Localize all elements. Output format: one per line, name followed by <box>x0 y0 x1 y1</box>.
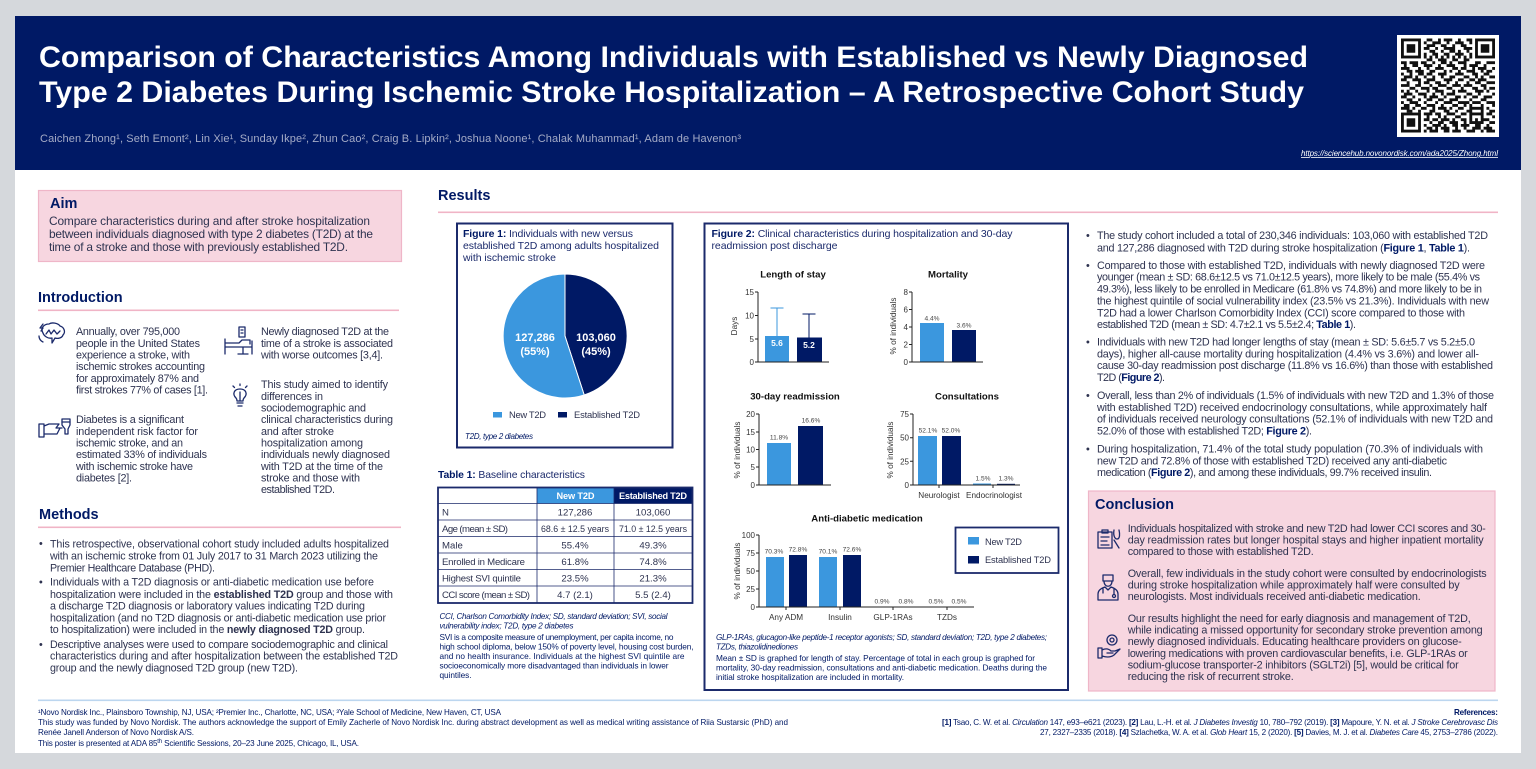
results bullets <box>1086 230 1494 479</box>
chart: length of stay: Days <box>730 317 739 335</box>
figure 1 footnote: T2D, type 2 diabetes <box>465 432 533 441</box>
chart: anti-diabetic medication: 70.1% <box>819 548 837 556</box>
icon: doctor <box>1098 575 1118 600</box>
results bullets: • <box>1086 443 1090 455</box>
intro text: worse outcomes: with worse outcomes [3,4]. <box>260 350 383 362</box>
references: [1] Tsao, C. W. et al. Circulation 147, e93–e621 (2023). [2] Lau, L.-H. et al. J Diabetes Investig 10, 780–792 (2019). [3] Mapoure, Y. N. et al. J Stroke Cerebrovasc Dis <box>942 718 1498 727</box>
chart: anti-diabetic medication: 75 <box>746 549 756 558</box>
chart: consultations: 75 <box>900 410 910 419</box>
chart: anti-diabetic medication: Insulin <box>828 613 852 622</box>
chart: length of stay: 5.6 <box>771 338 783 348</box>
chart: anti-diabetic medication: Anti-diabetic medication <box>811 514 923 524</box>
chart: 30-day readmission <box>733 392 840 490</box>
affiliations and acknowledgements: ¹Novo Nordisk Inc., Plainsboro Township, NJ, USA; ²Premier Inc., Charlotte, NC, USA; ³Yale School of Medicine, New Haven, CT, USA <box>38 708 502 717</box>
baseline table: 4.7 (2.1) <box>557 590 593 601</box>
conclusion text 2 <box>1128 568 1487 603</box>
icon: light bulb <box>233 384 247 406</box>
aim text: time of a stroke and those with previously established T2D. <box>49 240 348 254</box>
methods bullets: characteristics during and after hospitalization between the established T2D <box>50 651 398 663</box>
table footnotes: socioeconomically more disadvantaged than individuals in lower <box>440 660 669 670</box>
methods bullets: hospitalization were included in the established T2D group and those with <box>50 589 393 601</box>
chart: anti-diabetic medication: 50 <box>746 567 756 576</box>
panel: introduction <box>38 290 399 496</box>
references <box>942 708 1498 737</box>
figure 1 title <box>462 228 659 264</box>
conclusion text 2: during stroke hospitalization while approximately half were consulted by <box>1128 580 1460 592</box>
chart: consultations: 52.0% <box>942 428 960 434</box>
methods bullets: a discharge T2D diagnosis or laboratory values indicating T2D during <box>50 601 365 613</box>
affiliations and acknowledgements: This poster is presented at ADA 85th Scientific Sessions, 20–23 June 2025, Chicago, IL, USA. <box>38 739 359 748</box>
figure 2 footnotes: GLP-1RAs, glucagon-like peptide-1 receptor agonists; SD, standard deviation; T2D, type 2 diabetes; <box>716 633 1047 642</box>
baseline table: 68.6 ± 12.5 years <box>541 524 609 535</box>
figure 2 footnotes: Mean ± SD is graphed for length of stay. Percentage of total in each group is graphed for <box>716 653 1035 663</box>
conclusion text 3: newly diagnosed individuals. Educating healthcare providers on glucose- <box>1128 636 1462 648</box>
authors: Caichen Zhong¹, Seth Emont², Lin Xie¹, Sunday Ikpe², Zhun Cao², Craig B. Lipkin², Joshua Noone¹, Chalak Muhammad¹, Adam de Havenon³ <box>40 133 741 145</box>
chart: mortality: 8 <box>904 288 909 297</box>
aim text: between individuals diagnosed with type 2 diabetes (T2D) at the <box>49 227 373 241</box>
header banner <box>15 16 1521 170</box>
results bullets: During hospitalization, 71.4% of the total study population (70.3% of individuals with <box>1097 443 1483 455</box>
intro text: diabetes risk <box>75 414 208 484</box>
chart: consultations: 1.3% <box>998 476 1014 482</box>
figure 2 title <box>712 228 1013 252</box>
figure 2 footnotes: TZDs, thiazolidinediones <box>716 642 798 652</box>
baseline table: 127,286 <box>558 508 592 518</box>
intro text: stroke burden: Annually, over 795,000 <box>76 326 180 338</box>
affiliations and acknowledgements: This study was funded by Novo Nordisk. The authors acknowledge the support of Emily Zacherle of Novo Nordisk Inc. during abstract development as well as medical writing assistance of Riia Sustarsic (PhD) and <box>38 718 788 727</box>
intro text: stroke burden: for approximately 87% and <box>76 373 199 385</box>
baseline table: 74.8% <box>639 557 667 568</box>
pie legend <box>493 409 640 420</box>
intro text: study aim: clinical characteristics during <box>261 414 393 426</box>
chart: mortality: % of individuals <box>889 298 898 354</box>
methods bullets: • <box>39 639 43 651</box>
chart legend <box>956 528 1058 573</box>
results bullets: cause 30-day readmission post discharge (11.8% vs 16.6%) than those with established <box>1097 360 1493 372</box>
baseline table: New T2D <box>556 491 595 501</box>
figure 2 footnotes: mortality, 30-day readmission, consultations and anti-diabetic medication. Deaths during the <box>716 662 1047 672</box>
figure 2 title: Figure 2: Clinical characteristics during hospitalization and 30-day <box>712 228 1013 240</box>
aim text: Compare characteristics during and after stroke hospitalization <box>49 214 370 228</box>
results bullets: established T2D (mean ± SD: 4.7±2.1 vs 5.5±2.4; Table 1). <box>1097 319 1356 331</box>
pie legend: Established T2D <box>574 409 640 420</box>
chart: 30-day readmission: 20 <box>746 410 756 419</box>
table footnotes: high school diploma, below 150% of poverty level, housing cost burden, <box>440 642 694 652</box>
affiliations and acknowledgements <box>38 708 788 748</box>
chart: mortality: 3.6% <box>956 322 972 330</box>
chart: anti-diabetic medication: 25 <box>746 585 756 594</box>
baseline table: 61.8% <box>561 557 589 568</box>
baseline table: Established T2D <box>619 491 687 501</box>
intro text: worse outcomes: time of a stroke is associated <box>261 338 393 350</box>
methods bullets: • <box>39 576 43 588</box>
chart: length of stay <box>730 270 829 367</box>
intro text: study aim: differences in <box>261 391 323 403</box>
icon: hand and glucose meter <box>39 419 70 437</box>
figure 2 footnotes <box>716 633 1047 682</box>
results bullets: • <box>1086 337 1090 349</box>
intro text: diabetes risk: independent risk factor for <box>76 426 198 438</box>
intro text: diabetes risk: diabetes [2]. <box>76 472 132 484</box>
results bullets: T2D had a lower Charlson Comorbidity Index (CCI) score compared to those with <box>1097 307 1465 319</box>
baseline table: Highest SVI quintile <box>442 574 521 584</box>
conclusion text 3: sodium-glucose transporter-2 inhibitors (SGLT2i) [5], would be critical for <box>1128 660 1459 672</box>
methods bullets <box>39 538 398 674</box>
baseline table: CCI score (mean ± SD) <box>442 590 530 601</box>
icon: clipboard and stethoscope <box>1098 530 1120 548</box>
methods bullets: group and the newly diagnosed T2D group (new T2D). <box>50 662 298 674</box>
intro text: study aim: with T2D at the time of the <box>260 461 383 473</box>
intro text: worse outcomes: Newly diagnosed T2D at the <box>261 326 389 338</box>
conclusion text 2: neurologists. Most individuals received anti-diabetic medication. <box>1128 591 1421 603</box>
introduction heading: Introduction <box>38 290 123 306</box>
results bullets: new T2D and 72.8% of those with established T2D) received any anti-diabetic <box>1097 455 1448 467</box>
table footnotes: quintiles. <box>440 670 472 680</box>
table footnotes: SVI is a composite measure of unemployment, per capita income, no <box>440 632 674 642</box>
intro text: study aim: and after stroke <box>261 426 334 438</box>
chart: consultations: 25 <box>900 457 910 466</box>
chart: mortality: Mortality <box>928 270 969 280</box>
figure 1 title: Figure 1: Individuals with new versus <box>463 228 633 240</box>
chart: mortality: 4.4% <box>924 316 940 322</box>
intro text: stroke burden: experience a stroke, with <box>76 350 190 362</box>
chart legend: New T2D <box>985 537 1022 547</box>
intro text: diabetes risk: ischemic stroke, and an <box>76 438 183 450</box>
intro text: diabetes risk: with ischemic stroke have <box>75 461 193 473</box>
chart: mortality: 0 <box>904 358 909 367</box>
chart: anti-diabetic medication: 0 <box>751 603 756 612</box>
pie chart: 103,060 <box>576 332 616 344</box>
intro text: stroke burden <box>76 326 208 396</box>
table footnotes: and no health insurance. Individuals at the highest SVI quintile are <box>440 651 685 661</box>
conclusion text 1: day readmission rates but longer hospital stays and higher inpatient mortality <box>1128 534 1484 546</box>
methods heading: Methods <box>39 507 99 523</box>
figure 2 title: readmission post discharge <box>712 240 838 252</box>
conclusion heading: Conclusion <box>1095 497 1174 513</box>
chart: anti-diabetic medication: GLP-1RAs <box>873 613 913 622</box>
results bullets: the highest quintile of social vulnerability index (23.5% vs 21.3%). Individuals with new <box>1097 295 1489 307</box>
results bullets: 49.3%), less likely to be enrolled in Medicare (61.8% vs 74.8%) and more likely to be in <box>1097 283 1482 295</box>
chart legend: Established T2D <box>985 555 1051 565</box>
panel: table 1 <box>438 470 694 680</box>
intro text: diabetes risk: estimated 33% of individuals <box>76 449 208 461</box>
methods bullets: Descriptive analyses were used to compare sociodemographic and clinical <box>50 639 388 651</box>
intro text: study aim: This study aimed to identify <box>261 379 389 391</box>
chart: 30-day readmission: 5 <box>751 463 756 472</box>
intro text: study aim: established T2D. <box>261 484 335 496</box>
baseline table: Age (mean ± SD) <box>442 524 508 535</box>
icon: hand with target <box>1098 635 1120 658</box>
intro text: stroke burden: ischemic strokes accounting <box>76 361 205 373</box>
chart: mortality: 2 <box>904 340 909 350</box>
panel: aim <box>38 190 402 262</box>
chart: anti-diabetic medication: 100 <box>742 531 756 540</box>
methods bullets: hospitalization (and no T2D diagnosis or anti-diabetic medication use prior <box>50 612 386 624</box>
icon: hospital bed <box>225 327 252 354</box>
baseline table: 21.3% <box>639 574 667 584</box>
title <box>39 41 1308 109</box>
chart: mortality: 4 <box>904 323 909 332</box>
intro text: study aim <box>260 379 393 496</box>
title: Type 2 Diabetes During Ischemic Stroke Hospitalization – A Retrospective Cohort Study <box>39 76 1305 109</box>
pie chart: 127,286 <box>515 332 555 344</box>
results bullets: • <box>1086 390 1090 402</box>
results bullets: younger (mean ± SD: 68.6±12.5 vs 71.0±12.5 years), more likely to be male (55.4% vs <box>1097 272 1481 284</box>
intro text: study aim: stroke and those with <box>261 472 360 484</box>
aim text <box>49 214 373 254</box>
chart: anti-diabetic medication: 0.8% <box>898 598 914 606</box>
chart: length of stay: Length of stay <box>760 270 826 280</box>
baseline table: 23.5% <box>561 574 589 584</box>
pie chart: (55%) <box>520 346 550 358</box>
results bullets: and 127,286 diagnosed with T2D during stroke hospitalization (Figure 1, Table 1). <box>1097 242 1470 254</box>
chart: length of stay: 5 <box>750 335 755 344</box>
chart: anti-diabetic medication: 70.3% <box>765 548 783 556</box>
methods bullets: Individuals with a T2D diagnosis or anti-diabetic medication use before <box>50 576 374 588</box>
chart: anti-diabetic medication: 72.6% <box>843 546 861 554</box>
table footnotes: CCI, Charlson Comorbidity Index; SD, standard deviation; SVI, social <box>440 612 668 621</box>
chart: mortality <box>889 270 983 367</box>
table footnotes: vulnerability index; T2D, type 2 diabetes <box>440 622 574 630</box>
results bullets: Overall, less than 2% of individuals (1.5% of individuals with new T2D and 1.3% of those <box>1097 390 1494 402</box>
chart: consultations: Consultations <box>935 392 999 402</box>
conclusion text 3: reducing the risk of recurrent stroke. <box>1128 671 1294 683</box>
chart: 30-day readmission: 11.8% <box>770 434 788 442</box>
aim heading: Aim <box>50 196 77 212</box>
chart: 30-day readmission: % of individuals <box>733 422 742 478</box>
results bullets: with established T2D) received endocrinology consultations, while approximately half <box>1096 402 1488 414</box>
chart: anti-diabetic medication: 0.9% <box>874 598 890 606</box>
chart: consultations: 52.1% <box>919 428 937 434</box>
chart: anti-diabetic medication: Any ADM <box>769 613 803 622</box>
title: Comparison of Characteristics Among Individuals with Established vs Newly Diagnosed <box>39 41 1308 74</box>
baseline table: 103,060 <box>636 508 670 518</box>
chart: 30-day readmission: 10 <box>746 446 756 454</box>
conclusion text 3: while indicating a missed opportunity for secondary stroke prevention among <box>1127 624 1483 636</box>
intro text: diabetes risk: Diabetes is a significant <box>76 414 184 426</box>
results bullets: days), higher all-cause mortality during hospitalization (4.4% vs 3.6%) and lower all- <box>1097 349 1479 361</box>
chart: consultations: 50 <box>900 434 910 443</box>
footer <box>38 700 1498 748</box>
panel: figure 1 <box>457 224 672 448</box>
conclusion text 1 <box>1128 523 1486 558</box>
results heading: Results <box>438 188 490 204</box>
intro text: stroke burden: first strokes 77% of cases [1]. <box>76 384 208 396</box>
chart: length of stay: 0 <box>750 358 755 367</box>
figure 1 title: established T2D among adults hospitalized <box>463 240 659 252</box>
chart: anti-diabetic medication <box>733 514 974 622</box>
chart: length of stay: 5.2 <box>803 340 815 350</box>
pie chart: (45%) <box>581 346 611 358</box>
chart: anti-diabetic medication: 0.5% <box>928 598 944 606</box>
chart: anti-diabetic medication: % of individuals <box>733 543 742 599</box>
pie legend: New T2D <box>509 409 546 420</box>
table footnotes <box>440 612 694 680</box>
baseline table <box>438 487 692 603</box>
baseline table: 49.3% <box>639 540 667 552</box>
chart: anti-diabetic medication: 0.5% <box>951 598 967 606</box>
table title: Table 1: Baseline characteristics <box>438 470 585 481</box>
intro text: stroke burden: people in the United States <box>76 338 201 350</box>
pie chart <box>503 274 627 398</box>
chart: length of stay: 10 <box>745 312 755 320</box>
intro text: study aim: individuals newly diagnosed <box>261 449 390 461</box>
results bullets: of individuals received neurology consultations (52.1% of individuals with new T2D and <box>1097 414 1493 426</box>
chart: mortality: 6 <box>904 306 909 314</box>
baseline table: 55.4% <box>561 540 589 552</box>
chart: anti-diabetic medication: TZDs <box>937 613 957 622</box>
figure 1 title: with ischemic stroke <box>462 252 556 264</box>
chart: 30-day readmission: 15 <box>746 428 756 437</box>
conclusion text 2: Overall, few individuals in the study cohort were consulted by endocrinologists <box>1128 568 1487 580</box>
baseline table: Enrolled in Medicare <box>442 557 525 568</box>
baseline table: N <box>442 508 449 518</box>
intro text: study aim: sociodemographic and <box>261 402 366 414</box>
baseline table: Male <box>442 540 463 552</box>
figure 2 footnotes: initial stroke hospitalization are included in mortality. <box>716 672 904 682</box>
methods bullets: to hospitalization) were included in the newly diagnosed T2D group. <box>50 624 365 636</box>
conclusion text 1: Individuals hospitalized with stroke and new T2D had lower CCI scores and 30- <box>1128 523 1486 535</box>
baseline table: 71.0 ± 12.5 years <box>619 524 687 535</box>
results bullets: • <box>1086 230 1090 242</box>
chart: 30-day readmission: 30-day readmission <box>750 392 840 402</box>
conclusion text 3: Our results highlight the need for early diagnosis and management of T2D, <box>1128 613 1471 625</box>
chart: 30-day readmission: 16.6% <box>802 418 820 424</box>
conclusion text 3: lowering medications with proven cardiovascular benefits, i.e. GLP-1RAs or <box>1128 648 1468 660</box>
results bullets: medication (Figure 2), and among these individuals, 99.7% received insulin. <box>1097 467 1432 479</box>
icon: brain <box>39 323 64 343</box>
references: References: <box>1454 708 1498 717</box>
methods bullets: • <box>39 538 43 550</box>
chart: consultations: Endocrinologist <box>966 491 1023 500</box>
methods bullets: Premier Healthcare Database (PHD). <box>50 562 215 574</box>
chart: anti-diabetic medication: 72.8% <box>789 546 807 554</box>
results bullets: The study cohort included a total of 230,346 individuals: 103,060 with established T2D <box>1097 230 1488 242</box>
chart: consultations <box>886 392 1023 500</box>
chart: consultations: % of individuals <box>886 422 895 478</box>
baseline table: 5.5 (2.4) <box>635 590 671 601</box>
panel: methods <box>38 507 401 674</box>
methods bullets: with an ischemic stroke from 01 July 2017 to 31 March 2023 utilizing the <box>49 550 378 562</box>
methods bullets: This retrospective, observational cohort study included adults hospitalized <box>50 538 389 550</box>
chart: consultations: Neurologist <box>918 491 960 500</box>
results bullets: Compared to those with established T2D, individuals with newly diagnosed T2D were <box>1097 260 1485 272</box>
references: 27, 2327–2335 (2018). [4] Szlachetka, W. A. et al. Glob Heart 15, 2 (2020). [5] Davies, M. J. et al. Diabetes Care 45, 2753–2786 (2022). <box>1040 728 1498 737</box>
chart: length of stay: 15 <box>745 288 755 297</box>
intro text: study aim: hospitalization among <box>261 438 363 450</box>
panel: figure 2 <box>704 224 1068 690</box>
poster link: https://sciencehub.novonordisk.com/ada2025/Zhong.html <box>1301 149 1498 158</box>
chart: consultations: 0 <box>905 481 910 490</box>
conclusion text 1: compared to those with established T2D. <box>1128 546 1314 558</box>
chart: 30-day readmission: 0 <box>751 481 756 490</box>
intro text: worse outcomes <box>260 326 393 362</box>
results bullets: Individuals with new T2D had longer lengths of stay (mean ± SD: 5.6±5.7 vs 5.2±5.0 <box>1097 337 1475 349</box>
results bullets: • <box>1086 260 1090 272</box>
QR code <box>1397 35 1499 137</box>
affiliations and acknowledgements: Renée Janell Anderson of Novo Nordisk A/S. <box>38 728 194 737</box>
conclusion text 3 <box>1127 613 1483 683</box>
results bullets: 52.0% of those with established T2D; Figure 2). <box>1097 425 1312 437</box>
chart: consultations: 1.5% <box>975 476 991 482</box>
results bullets: T2D (Figure 2). <box>1097 372 1165 384</box>
panel: conclusion <box>1088 491 1495 691</box>
